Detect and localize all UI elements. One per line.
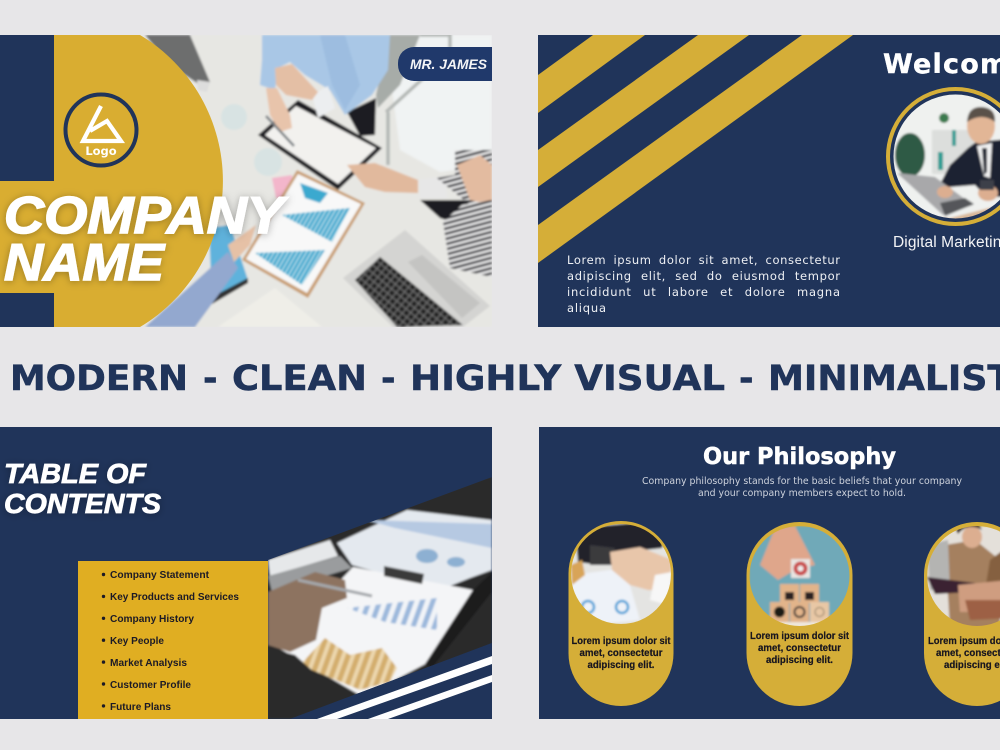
contents list: Future Plans	[110, 701, 171, 713]
card 2: target blocks	[746, 522, 852, 706]
card text: adipiscing elit.	[766, 655, 833, 666]
card text	[572, 636, 671, 671]
banner: style tagline: -	[739, 359, 754, 399]
navy corner with white stripes	[290, 643, 492, 719]
gold half circle	[0, 35, 223, 327]
panel: table of contents	[0, 427, 492, 719]
body text: adipiscing elit, sed do eiusmod tempor	[567, 269, 840, 283]
name tag: Mr. James	[398, 47, 492, 81]
contents list: Key Products and Services	[110, 591, 239, 603]
card text	[750, 631, 850, 666]
card text: adipiscing elit.	[588, 660, 655, 671]
title: company name	[4, 187, 289, 292]
photo: handshake	[570, 520, 672, 625]
body text	[567, 253, 840, 315]
panel: our philosophy	[539, 427, 1000, 719]
contents list: Company Statement	[110, 569, 209, 581]
card text	[928, 636, 1000, 671]
photo: stacked hands	[927, 524, 1000, 628]
panel: welcome slide	[538, 35, 1000, 327]
banner: style tagline: -	[381, 359, 396, 399]
portrait ring	[888, 89, 1000, 225]
card text: amet, consectetur	[758, 643, 841, 654]
contents list: Customer Profile	[110, 679, 191, 691]
card text: amet, consectetur	[580, 648, 663, 659]
intro text: Company philosophy stands for the basic beliefs that your company	[642, 476, 962, 487]
heading: table of contents	[4, 458, 161, 519]
body text: aliqua	[567, 301, 606, 315]
contents list: Market Analysis	[110, 657, 187, 669]
card text: Lorem ipsum dolor sit	[750, 631, 850, 642]
gold diagonal stripes	[538, 35, 853, 263]
body text: incididunt ut labore et dolore magna	[567, 285, 840, 299]
card 3: team hands	[924, 522, 1000, 706]
intro text	[642, 476, 962, 499]
contents list: Company History	[110, 613, 194, 625]
heading: table of contents: CONTENTS	[4, 488, 161, 519]
banner: style tagline: -	[203, 359, 218, 399]
banner: style tagline: CLEAN	[232, 359, 367, 399]
body text: Lorem ipsum dolor sit amet, consectetur	[567, 253, 840, 267]
logo badge: Logo	[85, 144, 117, 158]
panel: company name cover	[0, 35, 492, 327]
banner: style tagline	[10, 359, 1000, 399]
heading: table of contents: TABLE OF	[4, 458, 147, 489]
contents list	[78, 561, 268, 719]
contents list: Key People	[110, 635, 164, 647]
title: company name: COMPANY	[4, 187, 289, 245]
card 1: handshake	[568, 520, 674, 706]
intro text: and your company members expect to hold.	[698, 488, 906, 499]
banner: style tagline: MINIMALIST	[768, 359, 1000, 399]
logo badge	[66, 94, 136, 166]
banner: style tagline: HIGHLY VISUAL	[410, 359, 725, 399]
photo: chart documents	[268, 477, 492, 719]
heading: our philosophy: Our Philosophy	[703, 444, 896, 470]
photo: man at laptop	[894, 94, 1000, 218]
name tag: Mr. James: MR. JAMES	[410, 57, 487, 72]
card text: Lorem ipsum dolor sit	[572, 636, 671, 647]
title: company name: NAME	[4, 234, 165, 292]
banner: style tagline: MODERN	[10, 359, 188, 399]
photo: wooden blocks	[749, 526, 851, 628]
photo: team meeting at table	[144, 35, 492, 327]
